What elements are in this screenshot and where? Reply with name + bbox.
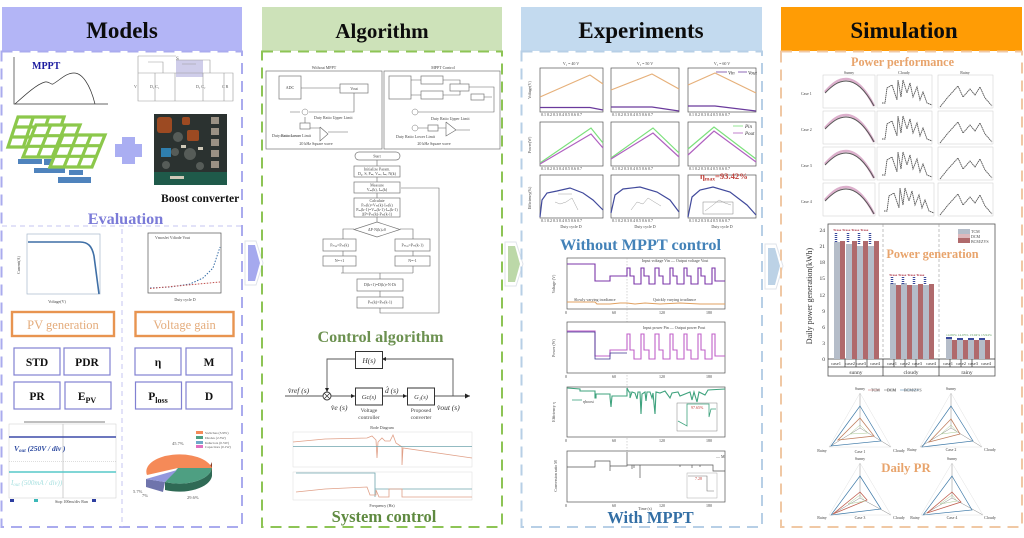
radar chart case 2: Rainy (907, 447, 917, 452)
boost converter circuit: C R (222, 84, 229, 89)
radar chart case 3: Sunny (855, 456, 865, 461)
conversion ratio chart: 180 (706, 503, 712, 508)
column headings: Sunny (844, 70, 854, 75)
flowchart: MPPT algorithm: Vₘ(k), Iₘ(k) (367, 187, 388, 193)
system control heading: System control (332, 507, 437, 526)
efficiency chart column 1: Efficiency(%) (527, 186, 532, 209)
loss breakdown pie chart: 7% (142, 493, 148, 498)
dynamic voltage chart: 60 (612, 310, 616, 315)
radar chart case 4: Cloudy (984, 515, 996, 520)
experiments heading: Experiments (578, 18, 704, 43)
dynamic power chart: Input power Pin — Output power Pout (643, 325, 706, 330)
dynamic efficiency chart: 97.65% (691, 405, 704, 410)
power chart column 3: Pout (744, 132, 755, 137)
efficiency chart column 1: Duty cycle D (560, 224, 582, 229)
radar chart case 2: Sunny (946, 386, 956, 391)
dynamic power chart: 120 (659, 374, 665, 379)
power chart column 3: Pin (744, 125, 752, 130)
metric PDR: PDR (75, 357, 100, 369)
flowchart: MPPT algorithm: ΔP·N(k)≥0 (368, 227, 386, 232)
block diagram: without MPPT (266, 65, 382, 149)
dynamic power chart: 60 (612, 374, 616, 379)
radar chart case 2: Cloudy (984, 447, 996, 452)
dynamic voltage chart: Quickly varying irradiance (653, 297, 696, 302)
block diagram: without MPPT: Vout (350, 86, 359, 91)
column headings: Cloudy (898, 70, 910, 75)
metric Ploss (136, 382, 182, 409)
radar chart case 1: Rainy (817, 448, 827, 453)
daily power generation bar chart: sunny (849, 370, 863, 376)
dynamic efficiency chart: ηboost (583, 399, 595, 404)
radar legend: DCM (887, 388, 897, 392)
experiments dashed frame (522, 52, 762, 527)
radar chart case 3: Case 3 (855, 515, 865, 520)
daily power generation bar chart (805, 224, 995, 376)
models header (2, 7, 242, 51)
flowchart: MPPT algorithm: D(k+1)=D(k)+N·Dt (364, 282, 397, 287)
power curves case 2: Case 2 (801, 127, 812, 132)
metric D: D (205, 391, 213, 403)
panel: experiments (521, 7, 762, 527)
I-V curve chart (16, 234, 100, 304)
models dashed frame (2, 52, 242, 527)
oscilloscope capture: (250V / div ) (26, 444, 66, 453)
daily power generation bar chart: 15 (820, 276, 825, 282)
metric EPV: PV (86, 396, 96, 405)
closed-loop block diagram: converter (411, 415, 432, 421)
power curves case 3 (801, 147, 993, 180)
voltage chart column 2: V₂ = 50 V (637, 61, 653, 66)
dynamic voltage chart: 0 (565, 310, 567, 315)
arrow: models to algorithm (245, 241, 263, 285)
daily power generation bar chart: case2 (956, 361, 966, 366)
MPPT curve: MPPT (32, 61, 61, 72)
daily power generation bar chart: 18 (820, 260, 825, 266)
dynamic efficiency chart: 0 (565, 438, 567, 443)
block diagram: MPPT control: 20 kHz Square wave (417, 141, 451, 146)
without MPPT control heading: Without MPPT control (560, 235, 721, 254)
conversion ratio chart: 0 (565, 503, 567, 508)
models heading: Models (86, 18, 158, 43)
dynamic efficiency chart: Efficiency η (551, 402, 556, 422)
conversion ratio chart: 120 (659, 503, 665, 508)
metric Ploss: P (148, 391, 155, 403)
flowchart: MPPT algorithm: Initialize Param. (364, 166, 390, 172)
loss breakdown pie chart: 45.7% (172, 441, 184, 446)
daily power generation bar chart: case3 (856, 361, 867, 366)
power chart column 3: 0.1 0.2 0.3 0.4 0.5 0.6 0.7 (689, 166, 730, 171)
oscilloscope capture: V (14, 444, 19, 453)
flowchart: MPPT algorithm: Pₘ(k-1)=Vₘ(k-1)·Iₘ(k-1) (356, 207, 398, 212)
loss breakdown pie chart: 5.7% (133, 489, 143, 494)
closed-loop block diagram: Gc(s) (362, 394, 376, 401)
voltage gain chart: Vmosfet Vdiode Vout (155, 235, 191, 240)
daily power generation bar chart: cloudy (904, 370, 919, 376)
simulation header (781, 7, 1022, 51)
metric Ploss: loss (155, 396, 168, 405)
flowchart: MPPT algorithm: Pₘ(k)=Pₘ(k-1) (368, 300, 393, 304)
peak efficiency callout: η (700, 171, 705, 181)
conversion ratio chart: 60 (612, 503, 616, 508)
metric PR: PR (29, 391, 45, 403)
flowchart: MPPT algorithm: Measure (370, 182, 384, 188)
metric STD (14, 348, 60, 375)
oscilloscope capture: Stop 100ms/div Run (55, 499, 88, 504)
simulation heading: Simulation (850, 18, 958, 43)
peak efficiency callout: =93.42% (715, 171, 748, 181)
sunny bars: Tcase Tcase Tcase Tcase (833, 228, 869, 232)
loss breakdown pie chart: Diodes (2.3W) (205, 436, 227, 440)
flowchart: MPPT algorithm: Calculate (369, 198, 385, 203)
power performance heading: Power performance (851, 55, 955, 69)
metric PDR (64, 348, 110, 375)
power chart column 1 (527, 122, 603, 171)
rainy bars: 14.06% 14.03% 13.94% 13.94% (946, 333, 992, 337)
conversion ratio chart (553, 451, 725, 511)
radar chart case 2 (907, 386, 996, 452)
bar legend: DCM (971, 234, 981, 239)
radar chart case 4: Case 4 (947, 515, 957, 520)
metric D (186, 382, 232, 409)
closed-loop block diagram: controller (358, 415, 380, 421)
block diagram: MPPT control (384, 65, 500, 149)
voltage chart column 1: V₁ = 40 V (563, 61, 579, 66)
daily power generation bar chart: case1 (943, 361, 953, 366)
daily power generation bar chart: 12 (820, 293, 825, 299)
panel: models (2, 7, 242, 527)
conversion ratio chart: Conversion ratio M (553, 460, 558, 492)
boost converter label: Boost converter (161, 192, 239, 205)
voltage gain box: Voltage gain (153, 318, 217, 332)
metric EPV: E (78, 391, 86, 403)
flowchart: MPPT algorithm (323, 152, 439, 313)
efficiency chart column 2: Duty cycle D (634, 224, 656, 229)
daily power generation bar chart: 9 (822, 309, 825, 315)
daily power generation bar chart: 3 (822, 341, 825, 347)
bar legend: TCM (971, 229, 980, 234)
Bode diagram: Frequency (Hz) (369, 503, 395, 508)
MPPT curve (14, 57, 108, 104)
rainy bars (946, 333, 992, 359)
peak efficiency callout: max (705, 176, 715, 182)
cloudy bars: Tcase Tcase Tcase Tcase (889, 273, 925, 277)
daily PR heading: Daily PR (881, 461, 931, 475)
closed-loop block diagram: v̂out (s) (437, 403, 460, 412)
power chart column 1: 0.1 0.2 0.3 0.4 0.5 0.6 0.7 (541, 166, 582, 171)
closed-loop block diagram: Voltage (361, 408, 378, 414)
power curves case 1 (801, 75, 993, 108)
evaluation horizontal divider (2, 226, 242, 527)
daily power generation bar chart: case2 (845, 361, 855, 366)
dynamic voltage chart: Slowly varying irradiance (574, 297, 616, 302)
loss breakdown pie chart: Capacitors (0.1W) (205, 445, 232, 449)
efficiency chart column 3: Duty cycle D (711, 224, 733, 229)
algorithm dashed frame (262, 52, 502, 527)
efficiency chart column 2: 0.1 0.2 0.3 0.4 0.5 0.6 0.7 (612, 218, 653, 223)
radar chart case 3 (817, 456, 905, 520)
oscilloscope capture: out (13, 483, 20, 488)
column headings: Rainy (960, 70, 970, 75)
boost converter circuit: D₂ C₂ (196, 84, 206, 89)
efficiency chart column 2 (611, 175, 679, 229)
daily power generation bar chart: case2 (900, 361, 910, 366)
evaluation heading: Evaluation (88, 210, 163, 228)
column headings (844, 70, 970, 75)
voltage chart column 3: 0.1 0.2 0.3 0.4 0.5 0.6 0.7 (689, 112, 730, 117)
arrow: experiments to simulation (765, 244, 783, 289)
experiments header (521, 7, 762, 51)
daily power generation bar chart: case3 (968, 361, 979, 366)
closed-loop block diagram: d̂ (s) (385, 384, 399, 395)
dynamic power chart (551, 322, 725, 379)
power curves case 1: Case 1 (801, 91, 812, 96)
algorithm heading: Algorithm (335, 19, 429, 43)
flowchart: MPPT algorithm: Pₘₐₓ=Pₘ(k) (330, 242, 349, 248)
daily power generation bar chart: 24 (820, 228, 825, 234)
efficiency chart column 3 (688, 175, 756, 229)
block diagram: MPPT control: Duty Ratio Lower Limit (396, 134, 436, 139)
flowchart: MPPT algorithm: N=-1 (408, 258, 417, 263)
icon: solar panels (8, 117, 105, 183)
power chart column 2 (611, 122, 679, 171)
block diagram: without MPPT: Duty Ratio Lower Limit (272, 133, 312, 138)
panel: simulation (781, 7, 1022, 527)
closed-loop block diagram: v̂ref (s) (288, 386, 310, 395)
oscilloscope capture: I (11, 479, 13, 487)
power chart column 2: 0.1 0.2 0.3 0.4 0.5 0.6 0.7 (612, 166, 653, 171)
Bode diagram: Bode Diagram (370, 425, 395, 430)
voltage gain box (136, 312, 234, 336)
control algorithm heading: Control algorithm (317, 328, 444, 346)
loss breakdown pie chart: 29.6% (187, 495, 199, 500)
power curves case 4: Case 4 (801, 199, 812, 204)
loss breakdown pie chart: Inductors (0.5W) (205, 441, 230, 445)
power chart column 1: Power(W) (527, 136, 532, 153)
metric eta (135, 348, 181, 375)
arrow: algorithm to experiments (505, 242, 523, 286)
dynamic power chart: Power (W) (551, 339, 556, 357)
boost converter circuit: V (134, 84, 137, 89)
dynamic voltage chart (551, 258, 725, 502)
metric M: M (204, 357, 215, 369)
dynamic voltage chart: Input voltage Vin — Output voltage Vout (642, 258, 709, 263)
conversion ratio chart: — M (715, 454, 725, 459)
daily power generation bar chart: 6 (822, 325, 825, 331)
daily power generation bar chart: case1 (831, 361, 841, 366)
I-V curve chart: Current(A) (16, 255, 21, 274)
boost converter circuit: D₁ C₁ (150, 84, 160, 89)
oscilloscope capture: out (19, 449, 26, 454)
dynamic voltage chart: 120 (659, 310, 665, 315)
dynamic voltage chart: Voltage (V) (551, 274, 556, 293)
metric M (186, 348, 232, 375)
oscilloscope capture: (500mA / div)) (20, 479, 63, 487)
radar legend (868, 388, 922, 392)
flowchart: MPPT algorithm: N=+1 (335, 258, 344, 263)
daily power generation bar chart: 0 (822, 357, 825, 363)
flowchart: MPPT algorithm: Pₘ(k)=Vₘ(k)·Iₘ(k) (361, 202, 393, 208)
dynamic efficiency chart (551, 387, 725, 443)
voltage chart column 1: 0.1 0.2 0.3 0.4 0.5 0.6 0.7 (541, 112, 582, 117)
daily power generation bar chart: case4 (981, 361, 992, 366)
dynamic efficiency chart: 120 (659, 438, 665, 443)
voltage chart column 2 (611, 61, 679, 117)
metric eta: η (155, 357, 162, 369)
bar legend: BCM/ZVS (971, 239, 989, 244)
efficiency chart column 3: 0.1 0.2 0.3 0.4 0.5 0.6 0.7 (689, 218, 730, 223)
daily power generation bar chart: 21 (820, 244, 825, 250)
flowchart: MPPT algorithm: ΔP=Pₘ(k)-Pₘ(k-1) (362, 212, 393, 216)
dynamic efficiency chart: 60 (612, 438, 616, 443)
conversion ratio chart: 7.28 (695, 476, 702, 481)
daily power generation bar chart: case4 (926, 361, 937, 366)
radar chart case 4: Rainy (910, 515, 920, 520)
voltage chart column 2: 0.1 0.2 0.3 0.4 0.5 0.6 0.7 (612, 112, 653, 117)
block diagram: MPPT control: MPPT Control (431, 65, 456, 70)
panel: algorithm (262, 7, 502, 527)
simulation dashed frame (781, 52, 1022, 527)
radar chart case 2: Case 2 (946, 447, 956, 452)
daily power generation bar chart: case1 (887, 361, 897, 366)
daily power generation bar chart: rainy (961, 370, 973, 376)
power curves case 3: Case 3 (801, 163, 812, 168)
boost converter photo (154, 114, 227, 185)
dynamic power chart: 0 (565, 374, 567, 379)
oscilloscope capture (9, 422, 116, 504)
voltage gain chart: Duty cycle D (174, 297, 196, 302)
metric STD: STD (26, 357, 48, 369)
radar chart case 1 (817, 386, 905, 454)
PV generation box: PV generation (27, 318, 100, 332)
with MPPT heading: With MPPT (607, 508, 694, 527)
sunny bars (833, 228, 879, 359)
power curves case 4 (801, 183, 993, 216)
radar chart case 1: Cloudy (893, 448, 905, 453)
closed-loop block diagram: G₁(s) (414, 394, 428, 401)
voltage chart column 1 (527, 61, 603, 117)
dynamic efficiency chart: 180 (706, 438, 712, 443)
flowchart: MPPT algorithm: Start (373, 154, 382, 158)
voltage chart column 3: Vout (748, 72, 758, 76)
closed-loop block diagram: H(s) (361, 356, 376, 365)
power curves case 2 (801, 111, 993, 144)
radar chart case 4: Sunny (947, 456, 957, 461)
bar legend (958, 229, 989, 244)
closed-loop block diagram: Proposed (411, 408, 431, 414)
power generation heading: Power generation (886, 247, 979, 261)
I-V curve chart: Voltage(V) (48, 299, 67, 304)
flowchart: MPPT algorithm: Pₘₐₓ=Pₘ(k-1) (402, 242, 424, 248)
conversion ratio chart: Time (s) (638, 506, 652, 511)
radar legend: BCM/ZVS (904, 388, 922, 392)
PV generation box (12, 312, 114, 336)
voltage chart column 3: V₃ = 60 V (714, 61, 730, 66)
closed-loop block diagram (285, 352, 470, 421)
voltage chart column 3: Vin (728, 72, 735, 76)
loss breakdown pie chart: Switches (3.9W) (205, 431, 229, 435)
daily power generation bar chart: case3 (912, 361, 923, 366)
flowchart: MPPT algorithm: D₀, S, Pₘ, Vₘ, Iₘ, N(k) (358, 171, 397, 177)
radar chart case 3: Rainy (817, 515, 827, 520)
efficiency chart column 1 (527, 175, 603, 229)
loss breakdown pie chart (133, 431, 232, 500)
icon: plus (115, 137, 142, 164)
daily power generation bar chart: case4 (870, 361, 881, 366)
dynamic power chart: 180 (706, 374, 712, 379)
metric EPV (65, 382, 111, 409)
efficiency chart column 1: 0.1 0.2 0.3 0.4 0.5 0.6 0.7 (541, 218, 582, 223)
cloudy bars (889, 273, 934, 359)
block diagram: without MPPT: ADC (286, 85, 295, 90)
radar chart case 1: Sunny (855, 386, 865, 391)
block diagram: without MPPT: 20 kHz Square wave (299, 141, 333, 146)
voltage chart column 1: Voltage(V) (527, 80, 532, 99)
voltage chart column 3 (688, 61, 758, 117)
algorithm header (262, 7, 502, 51)
boost converter circuit: S (176, 57, 179, 62)
boost converter circuit (134, 56, 233, 101)
radar chart case 3: Cloudy (893, 515, 905, 520)
block diagram: without MPPT: Duty Ratio Upper Limit (314, 115, 353, 120)
block diagram: MPPT control: Duty Ratio Upper Limit (431, 116, 470, 121)
closed-loop block diagram: v̂e (s) (331, 403, 348, 412)
Bode diagram (293, 425, 472, 508)
metric PR (14, 382, 60, 409)
voltage gain chart (148, 233, 221, 302)
radar legend: TCM (871, 388, 880, 392)
power chart column 3 (688, 122, 756, 171)
dynamic voltage chart: 180 (706, 310, 712, 315)
daily power generation bar chart: Daily power generation(kWh) (805, 247, 814, 344)
block diagram: without MPPT: Without MPPT (312, 65, 337, 70)
radar chart case 1: Case 1 (855, 449, 865, 454)
radar chart case 4 (910, 456, 996, 520)
